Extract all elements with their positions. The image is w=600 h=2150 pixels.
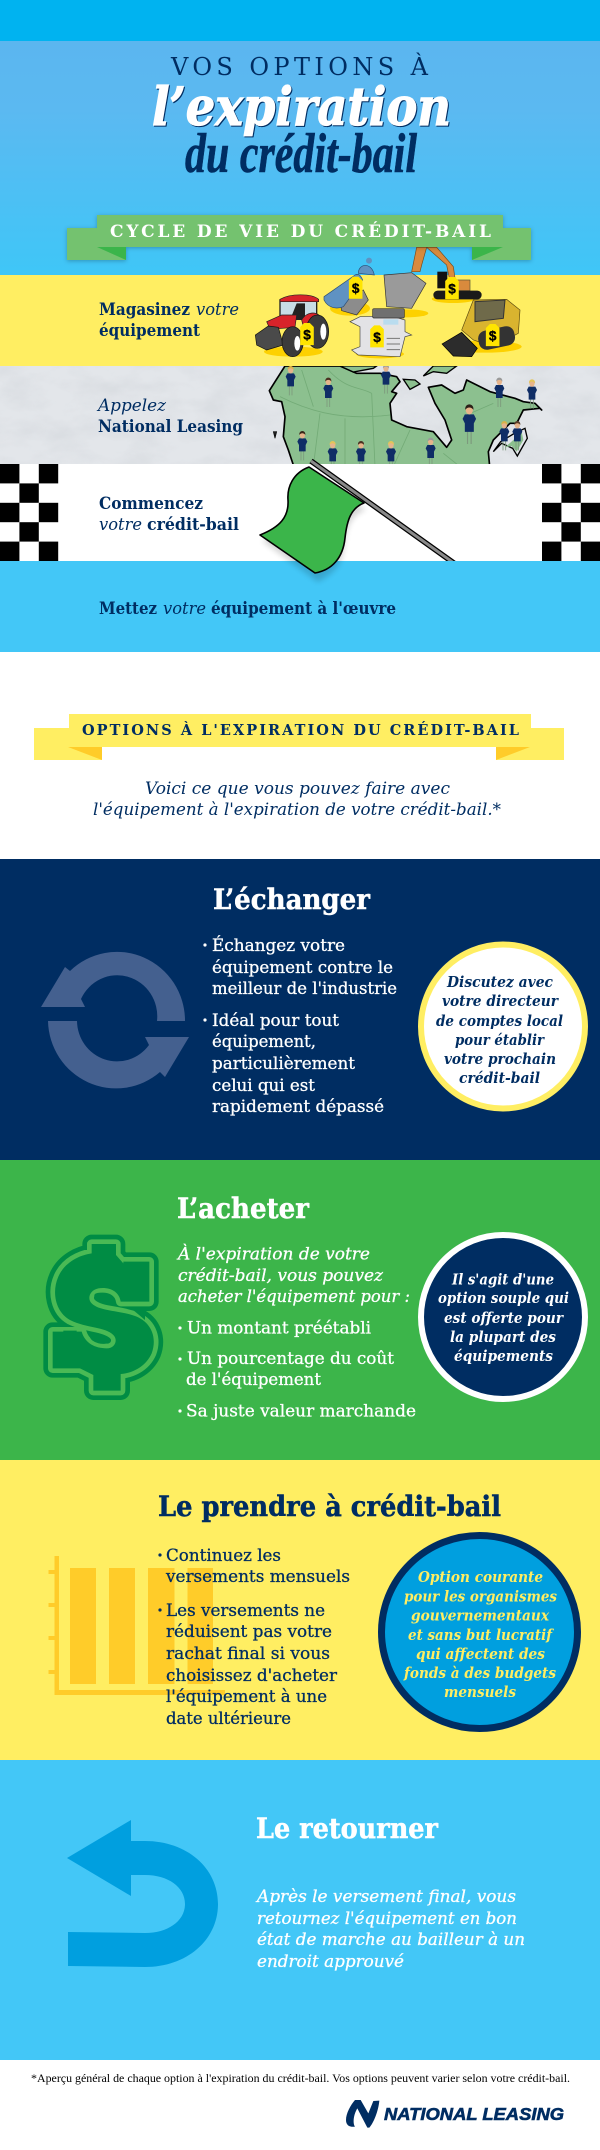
bullet list: équipement, [212,1032,316,1052]
intro text: l'équipement à l'expiration de votre crédit-bail.* [93,800,501,820]
callout circle: équipements [454,1347,553,1365]
text: appelez: National Leasing [98,417,243,437]
text: magasinez: votre [196,300,239,320]
icon: excavator [412,247,482,299]
price tags [300,277,499,347]
icon: cycle arrows [41,952,189,1088]
body text: À l'expiration de votre [176,1244,370,1264]
heading: L’acheter [177,1192,310,1225]
callout circle [421,944,585,1108]
bullet list: Les versements ne [166,1601,325,1621]
panel: start row with checkered flags [0,464,600,561]
callout circle: qui affectent des [416,1645,546,1663]
callout circle: et sans but lucratif [408,1626,554,1644]
callout circle: mensuels [444,1683,517,1701]
intro text [93,779,501,820]
callout circle: fonds à des budgets [403,1664,556,1682]
callout circle: de comptes local [436,1012,563,1030]
callout circle: gouvernementaux [411,1606,550,1624]
callout circle: est offerte pour [444,1309,564,1327]
callout circle: pour établir [455,1031,545,1049]
bullet list: celui qui est [212,1076,315,1096]
checkered pattern left [0,464,58,561]
icon: excavator bucket [384,273,426,308]
illustration: equipment with price tags [255,247,522,358]
callout circle: Option courante [418,1568,543,1586]
panel: blue put to work row [0,561,600,652]
callout circle: la plupart des [450,1328,556,1346]
callout circle: crédit-bail [459,1069,540,1087]
bullet list: l'équipement à une [166,1687,327,1707]
text: commencez [99,494,239,535]
bullet list: meilleur de l'industrie [212,979,397,999]
body text: Un montant préétabli [187,1318,372,1338]
body text: de l'équipement [186,1370,321,1390]
logo: National Leasing: NATIONAL LEASING [384,2104,564,2124]
banner: options [34,714,564,760]
bullet list: Échangez votre [212,935,345,956]
text: magasinez: Magasinez [99,300,190,320]
panel: l'acheter [0,1160,600,1460]
bullet list: versements mensuels [165,1567,350,1587]
banner: options: OPTIONS À L'EXPIRATION DU CRÉDIT-BAIL [82,721,519,739]
text: mettez [99,599,396,619]
text: mettez: votre [163,599,206,619]
body text: acheter l'équipement pour : [178,1287,410,1307]
heading: Le retourner [256,1812,439,1845]
footnote: *Aperçu général de chaque option à l'expiration du crédit-bail. Vos options peuvent varier selon votre crédit-bail. [31,2071,570,2085]
body text: retournez l'équipement en bon [257,1909,517,1929]
bullet list: choisissez d'acheter [166,1666,338,1686]
banner: cycle de vie: CYCLE DE VIE DU CRÉDIT-BAIL [110,221,491,242]
icon: green flag [260,461,458,582]
panel: le retourner [0,1760,600,2060]
bullet list: Continuez les [166,1546,281,1566]
bullet list: Idéal pour tout [212,1011,339,1031]
body text: Un pourcentage du coût [187,1349,394,1369]
checkered pattern right [542,464,600,561]
heading: Le prendre à crédit-bail [158,1490,501,1523]
callout circle: Discutez avec [446,973,553,991]
text: mettez: Mettez [99,599,157,619]
icon: blue tank [324,258,374,315]
heading: L’échanger [213,883,371,916]
callout circle: votre directeur [442,992,559,1010]
text: commencez: Commencez [99,494,203,514]
body text: Sa juste valeur marchande [186,1402,416,1422]
panel: map row [0,364,600,470]
icon: bar chart [48,1556,225,1695]
text: commencez: crédit-bail [147,515,239,535]
body text [255,1887,525,1972]
logo: National Leasing [346,2100,564,2128]
callout circle: votre prochain [444,1050,556,1068]
body text: crédit-bail, vous pouvez [178,1266,384,1286]
body text: état de marche au bailleur à un [257,1930,525,1950]
panel: yellow equipment row [0,275,600,366]
bullet list: particulièrement [212,1054,355,1074]
title [152,52,451,185]
callout circle [382,1536,578,1728]
bullet list: équipement contre le [212,958,393,978]
title line 3: du crédit-bail [185,123,417,185]
icon: tractor [255,295,329,357]
panel: l'échanger [0,859,600,1160]
body text: Après le versement final, vous [255,1887,516,1907]
text: magasinez: équipement [99,321,200,341]
callout circle: option souple qui [438,1289,569,1307]
bullet list: rachat final si vous [166,1644,330,1664]
title line 2: l’expiration [152,77,451,138]
body text: endroit approuvé [257,1952,404,1972]
panel: footer [0,2060,600,2150]
callout circle: Il s'agit d'une [451,1270,554,1288]
text: mettez: équipement à l'œuvre [211,599,396,619]
illustration: map of Canada with account managers [269,364,542,470]
bullet list [203,935,397,1117]
body text [176,1244,416,1422]
panel: header background [0,0,600,275]
bullet list: réduisent pas votre [166,1622,332,1642]
bullet list: rapidement dépassé [212,1097,384,1117]
bullet list: date ultérieure [166,1709,291,1729]
callout circle: pour les organismes [404,1588,557,1606]
panel: le prendre à crédit-bail [0,1460,600,1760]
cast shadows [264,295,522,358]
callout circle [421,1235,585,1399]
intro text: Voici ce que vous pouvez faire avec [145,779,450,799]
icon: skid steer loader [442,299,520,357]
icon: return arrow [67,1820,218,1967]
text: magasinez [99,300,239,341]
text: appelez: Appelez [96,396,167,416]
icon: dollar sign [53,1244,154,1391]
icon: copier [350,309,412,357]
banner: cycle de vie [67,215,531,260]
text: appelez [96,396,243,437]
title line 1: VOS OPTIONS À [170,52,429,81]
bullet list [158,1546,350,1729]
text: commencez: votre [99,515,142,535]
